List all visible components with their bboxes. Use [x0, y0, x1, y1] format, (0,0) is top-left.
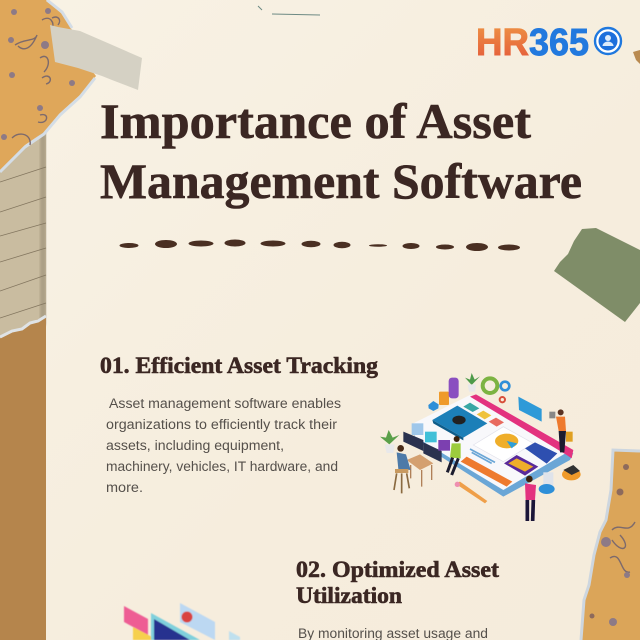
blue flag: [518, 397, 542, 422]
desk: [407, 454, 433, 470]
section 02 heading: 02. Optimized Asset: [296, 557, 499, 582]
section 01 body: machinery, vehicles, IT hardware, and: [106, 459, 338, 474]
divider: brush dashes: [120, 240, 520, 251]
section 01 body: Asset management software enables: [109, 396, 341, 411]
logo: HR365: HR: [476, 22, 529, 64]
monitors: [403, 432, 423, 451]
person pink: [526, 476, 533, 482]
section 01 body: more.: [106, 480, 143, 495]
cubes: [412, 423, 423, 435]
panel: patterned orange paper top left: [0, 0, 96, 172]
platform: [413, 397, 573, 497]
title: Management Software: [100, 153, 582, 209]
section 02 heading: Utilization: [296, 583, 402, 608]
illustration: analytics screens: [124, 603, 240, 640]
plant: [465, 373, 480, 385]
tape: green torn tape: [554, 228, 640, 322]
title: Importance of Asset: [100, 93, 531, 149]
person seated: [397, 445, 404, 452]
person orange: [549, 409, 573, 452]
logo: HR365: [476, 22, 621, 64]
small tags: [463, 403, 479, 412]
panel: patterned orange paper right: [581, 450, 640, 640]
title: [100, 93, 582, 209]
image card: [504, 455, 538, 476]
plant left: [380, 430, 399, 444]
printer: [562, 468, 581, 480]
video card: [432, 406, 487, 438]
chart card: [473, 427, 533, 462]
logo: HR365: 365: [529, 22, 589, 64]
section 01 body: assets, including equipment,: [106, 438, 284, 453]
corner scrap top right: [633, 50, 640, 64]
orange bar: [461, 457, 512, 487]
pink bar: [470, 394, 573, 458]
section 01 body: organizations to efficiently track their: [106, 417, 338, 432]
section 02 heading: [296, 557, 499, 608]
section 01 body: [106, 396, 341, 495]
illustration: isometric dashboard: [380, 373, 581, 521]
blue card: [525, 442, 557, 464]
stool: [395, 469, 408, 473]
panel: lined paper strip: [0, 130, 46, 338]
stray marks top: [258, 6, 320, 15]
bars: [428, 401, 439, 411]
person green: [454, 436, 460, 442]
gears: [483, 378, 497, 393]
tape: grey masking tape: [50, 25, 142, 90]
laptop: [543, 472, 553, 486]
section 01 heading: 01. Efficient Asset Tracking: [100, 353, 379, 378]
icon: user circle: [595, 28, 621, 54]
pencil: [455, 482, 487, 503]
panel: brown kraft strip: [0, 316, 46, 640]
